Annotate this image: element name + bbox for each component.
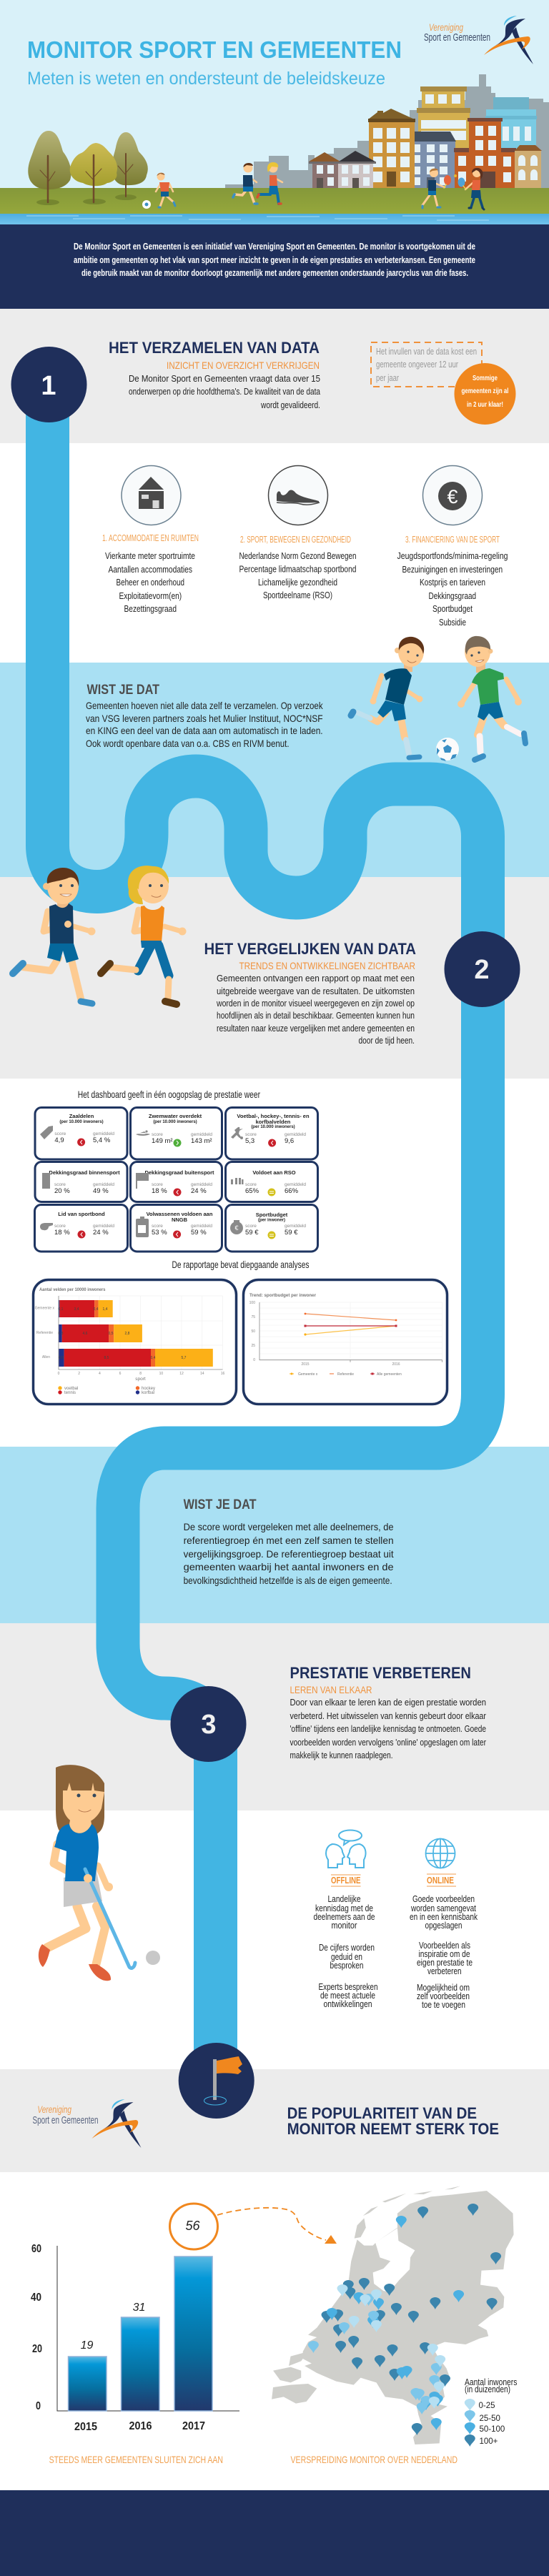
bar chart: aantal velden: 4 [99, 1372, 101, 1376]
line chart: trend sportbudget: Alle gemeenten [377, 1372, 402, 1377]
dashboard card: buitensport: Dekkingsgraad buitensport [144, 1169, 214, 1176]
column 1: accommodatie: Vierkante meter sportruimte [105, 550, 195, 561]
panel: wist je dat 2: De score wordt vergeleken met alle deelnemers, de [184, 1521, 394, 1532]
offline block: De cijfers worden [319, 1942, 375, 1953]
bar chart: aantal velden: 0,1 [59, 1307, 64, 1312]
column 3: financiering: Subsidie [439, 617, 466, 628]
map legend [465, 2377, 517, 2447]
panel: wist je dat 1: WIST JE DAT [87, 683, 159, 698]
grass strip [0, 188, 549, 214]
figure: soccer player 2 [458, 636, 525, 760]
dashboard card: velden: (per 10.000 inwoners) [251, 1125, 295, 1129]
dashboard card: buitensport: 18 % [152, 1187, 167, 1195]
dashboard card: sportbudget: 59 € [245, 1229, 259, 1237]
logo: Vereniging Sport en Gemeenten small: Vereniging [37, 2104, 71, 2115]
bar chart: aantal velden: Gemeente x [35, 1307, 54, 1311]
column 3: financiering: 3. FINANCIERING VAN DE SPORT [405, 535, 500, 545]
figure: tennis players [422, 168, 484, 209]
text block: prestatie: Door van elkaar te leren kan de eigen prestatie worden [290, 1697, 486, 1708]
panel: wist je dat 2: vergelijkingsgroep. De referentiegroep bestaat uit [184, 1548, 394, 1560]
column 3: financiering: Sportbudget [432, 603, 473, 614]
map legend: Aantal inwoners [465, 2377, 517, 2387]
panel: wist je dat 1: van VSG leveren partners zoals het Mulier Instituut, NOC*NSF [86, 713, 323, 724]
text block: prestatie: verbeterd. Het uitwisselen van kennis gebeurt door elkaar [290, 1710, 487, 1721]
bar chart: aantal velden: sport [135, 1377, 146, 1382]
dashboard card: sportbond: 18 % [54, 1229, 70, 1237]
bar chart: aantal gemeenten: 20 [32, 2343, 42, 2355]
column 1: accommodatie [102, 533, 199, 614]
icon: talking heads [326, 1830, 365, 1868]
bar chart: aantal velden: 2 [78, 1372, 80, 1376]
dashboard card: binnensport: gemiddeld [93, 1182, 114, 1187]
dashboard card: sportbond: 24 % [93, 1229, 109, 1237]
dashboard card: sportbond: score [54, 1224, 66, 1229]
dashboard card: nngb: score [152, 1224, 163, 1229]
text block: verzamelen: De Monitor Sport en Gemeenten vraagt data over 15 [129, 373, 320, 384]
column 2: sport bewegen: 2. SPORT, BEWEGEN EN GEZONDHEID [240, 535, 351, 545]
dashboard card: rso [226, 1162, 317, 1202]
offline block: Experts bespreken [319, 1981, 377, 1992]
offline block: ontwikkelingen [323, 1998, 372, 2009]
heading: populariteit [287, 2104, 499, 2138]
map legend: 25-50 [479, 2414, 500, 2423]
panel: wist je dat 1: Ook wordt openbare data van o.a. CBS en RIVM benut. [86, 738, 290, 749]
callout: orange circle [455, 363, 516, 425]
panel: wist je dat 2: gemeenten waarbij het aantal inwoners en de [184, 1561, 394, 1572]
online block: inspiratie om de [419, 1948, 470, 1959]
bar chart: aantal gemeenten: 56 [185, 2219, 200, 2233]
dashboard card: sportbudget: € [234, 1224, 239, 1232]
text block: prestatie: voorbeelden worden vervolgens 'online' opgeslagen om later [290, 1737, 487, 1748]
online block: eigen prestatie te [417, 1957, 473, 1968]
dashboard card: velden: 9,6 [285, 1137, 294, 1145]
text block: vergelijken: uitgebreide weergave van de resultaten. De uitkomsten [217, 986, 415, 996]
dashboard card: velden: 5,3 [245, 1137, 254, 1145]
header title: MONITOR SPORT EN GEMEENTEN [27, 36, 402, 63]
dashboard card: nngb [130, 1205, 222, 1252]
icon: globe [426, 1838, 455, 1868]
dashboard card: velden: korfbalvelden [256, 1119, 291, 1125]
figure: running woman in scene [257, 162, 282, 204]
dashboard card: zwemwater: gemiddeld [191, 1132, 212, 1137]
panel: wist je dat 2: bevolkingsdichtheid hetzelfde is als de eigen gemeente. [184, 1575, 392, 1586]
panel: wist je dat 2: WIST JE DAT [184, 1497, 257, 1512]
offline block [313, 1830, 377, 2009]
subheading: trends: TRENDS EN ONTWIKKELINGEN ZICHTBAAR [239, 960, 415, 971]
bar chart: aantal gemeenten [31, 2204, 239, 2433]
bar chart: aantal velden: 8,5 [104, 1356, 109, 1360]
step circle 2 [445, 931, 520, 1007]
dashboard card: zwemwater: 143 m² [191, 1137, 212, 1145]
footer band [0, 2490, 549, 2576]
icon: football [436, 738, 459, 761]
bar chart: aantal velden: Aantal velden per 10000 inwoners [39, 1287, 106, 1292]
heading: prestatie verbeteren: PRESTATIE VERBETEREN [290, 1664, 471, 1682]
map pins: 25-50 [308, 2294, 442, 2414]
city skyline and buildings [225, 74, 549, 188]
line chart: trend sportbudget: 50 [251, 1329, 255, 1334]
bar chart: aantal velden: 5,7 [182, 1356, 187, 1360]
map pins: 0-25 [337, 2284, 445, 2409]
callout: orange circle: gemeenten zijn al [462, 387, 509, 395]
dashboard card: sportbudget: 59 € [285, 1229, 298, 1237]
dashboard card: nngb: gemiddeld [191, 1224, 212, 1229]
bar chart: aantal velden: voetbal [64, 1387, 78, 1391]
bar chart: aantal gemeenten: 2015 [74, 2421, 97, 2433]
dashboard card: zaaldelen: 4,9 [54, 1136, 64, 1144]
icon: euro: € [447, 486, 458, 507]
line chart: trend sportbudget: 25 [251, 1344, 255, 1348]
dashboard card: nngb: 53 % [152, 1229, 167, 1237]
bar chart: aantal velden: 0,4 [94, 1307, 99, 1312]
dashboard card: zwemwater [130, 1108, 222, 1159]
online block: zelf voorbeelden [417, 1991, 470, 2001]
dashboard card: zwemwater: score [152, 1132, 163, 1137]
figure: boy with ball [142, 173, 175, 209]
online block: worden samengevat [410, 1903, 476, 1913]
dashboard card: zaaldelen: (per 10.000 inwoners) [59, 1120, 104, 1124]
bar chart: aantal velden: 4,6 [83, 1332, 88, 1336]
dashboard card: nngb: Volwassenen voldoen aan [147, 1211, 213, 1217]
column 3: financiering: Dekkingsgraad [429, 590, 476, 601]
online block: Goede voorbeelden [412, 1893, 475, 1904]
dashboard card: velden: Voetbal-, hockey-, tennis- en [237, 1113, 310, 1119]
dashboard card: rso: gemiddeld [285, 1182, 306, 1187]
bar chart: aantal gemeenten: 2017 [182, 2420, 205, 2432]
dashboard card: sportbudget: score [245, 1224, 257, 1229]
dashboard card: sportbudget [226, 1205, 317, 1252]
water strip [0, 214, 549, 224]
map pins: 50-100 [327, 2216, 464, 2430]
logo: Vereniging Sport en Gemeenten small: Sport en Gemeenten [33, 2115, 99, 2126]
figure: running man in scene [233, 163, 257, 204]
dashboard card: buitensport: 24 % [191, 1187, 207, 1195]
step circle 3 [170, 1686, 246, 1762]
report heading: De rapportage bevat diepgaande analyses [172, 1259, 309, 1270]
online block: toe te voegen [422, 1999, 465, 2010]
logo: Vereniging Sport en Gemeenten: Vereniging [429, 21, 463, 33]
column 1: accommodatie: Beheer en onderhoud [116, 577, 184, 588]
bar chart: aantal gemeenten: 40 [31, 2292, 41, 2304]
dashboard card: binnensport: Dekkingsgraad binnensport [49, 1169, 120, 1176]
figure: hockey player [39, 1765, 160, 1981]
bar chart: aantal velden: tennis [64, 1391, 76, 1395]
line chart: trend sportbudget: Gemeente x [298, 1372, 318, 1377]
dashboard card: sportbudget: gemiddeld [285, 1224, 306, 1229]
arrow: dashed curve to map [217, 2208, 337, 2244]
dashboard card: zwemwater: (per 10.000 inwoners) [153, 1120, 197, 1124]
map legend: 100+ [479, 2437, 498, 2446]
dashboard card: sportbudget: (per inwoner) [258, 1218, 285, 1222]
dashboard card: zaaldelen: gemiddeld [93, 1131, 114, 1136]
map: Nederland [272, 2186, 514, 2444]
text block: vergelijken [216, 973, 415, 1046]
figure: running man [13, 868, 96, 1004]
caption: steeds meer gemeenten: STEEDS MEER GEMEENTEN SLUITEN ZICH AAN [49, 2454, 223, 2465]
column 2: sport bewegen: Percentage lidmaatschap sportbond [239, 563, 356, 575]
dashboard card: rso: 65% [245, 1187, 259, 1195]
step circle 1 [11, 347, 87, 422]
dashboard card: sportbond: gemiddeld [93, 1224, 114, 1229]
subheading: leren van elkaar: LEREN VAN ELKAAR [290, 1684, 372, 1695]
step circle 1: 1 [41, 371, 56, 401]
online block [410, 1838, 478, 2010]
line chart: trend sportbudget: Referentie [337, 1372, 354, 1377]
dashboard card: sportbond [34, 1205, 127, 1252]
dashboard card: buitensport: gemiddeld [191, 1182, 212, 1187]
dashboard card: zwemwater: 149 m² [152, 1137, 173, 1145]
bar chart: aantal velden: 0,4 [151, 1356, 156, 1360]
text block: vergelijken: Gemeenten ontvangen een rapport op maat met een [217, 973, 415, 984]
panel: wist je dat 1: en KING een deel van de data aan om automatisch in te laden. [86, 725, 323, 736]
line chart: trend sportbudget: 2016 [392, 1362, 400, 1367]
logo: Vereniging Sport en Gemeenten small [33, 2099, 142, 2148]
online block: opgeslagen [425, 1920, 462, 1931]
header subtitle: Meten is weten en ondersteunt de beleidskeuze [27, 69, 385, 89]
dashboard card: zwemwater: Zwemwater overdekt [149, 1113, 202, 1119]
panel: wist je dat 1 [86, 683, 323, 749]
panel: wist je dat 2 [184, 1497, 394, 1586]
caption: verspreiding: VERSPREIDING MONITOR OVER NEDERLAND [290, 2454, 458, 2465]
bar chart: aantal velden: hockey [142, 1387, 155, 1391]
column 1: accommodatie: Exploitatievorm(en) [119, 590, 182, 601]
callout: orange circle: Sommige [473, 374, 498, 382]
dashboard card: buitensport: score [152, 1182, 163, 1187]
line chart: trend sportbudget: Trend: sportbudget per inwoner [249, 1293, 316, 1298]
bar chart: aantal velden: 2,8 [125, 1332, 130, 1336]
bar chart: aantal gemeenten: 0 [36, 2400, 41, 2412]
step circle 3: 3 [201, 1710, 217, 1740]
column 2: sport bewegen: Sportdeelname (RSO) [263, 590, 332, 600]
step circle 2: 2 [474, 955, 490, 985]
dashboard card: rso: Voldoet aan RSO [252, 1169, 296, 1176]
dashboard card: velden: score [245, 1132, 257, 1137]
callout: 12 uur: gemeente ongeveer 12 uur [376, 359, 458, 370]
dashboard card: nngb: NNGB [172, 1217, 188, 1223]
heading: het vergelijken van data: HET VERGELIJKEN VAN DATA [204, 940, 416, 958]
intro panel [0, 224, 549, 309]
bar chart: aantal velden: 8 [139, 1372, 142, 1376]
dashboard card: nngb: 59 % [191, 1229, 207, 1237]
offline block: de meest actuele [320, 1990, 375, 2001]
bar chart: aantal velden: 6 [119, 1372, 122, 1376]
subheading: inzicht: INZICHT EN OVERZICHT VERKRIJGEN [167, 360, 320, 371]
column 3: financiering: Bezuinigingen en investeringen [402, 564, 503, 575]
map legend: 50-100 [479, 2425, 505, 2434]
logo: Vereniging Sport en Gemeenten: Sport en Gemeenten [424, 32, 490, 44]
dashboard card: rso: 66% [285, 1187, 299, 1195]
bar chart: aantal velden: 0,5 [109, 1332, 114, 1336]
bar chart: aantal velden: 14 [200, 1372, 204, 1376]
callout: orange circle: in 2 uur klaar! [467, 400, 503, 409]
bar chart: aantal velden: 0,5 [59, 1356, 64, 1360]
icon: house [122, 466, 181, 525]
column 1: accommodatie: 1. ACCOMMODATIE EN RUIMTEN [102, 533, 199, 543]
text block: vergelijken: hoofdlijnen als in detail beschikbaar. Gemeenten kunnen hun [217, 1010, 415, 1021]
text block: prestatie: 'offline' tijdens een landelijke kennisdag te ontmoeten. Goede [290, 1723, 486, 1734]
figure: running woman [101, 866, 186, 1004]
offline block: OFFLINE [331, 1875, 361, 1886]
column 2: sport bewegen [239, 535, 356, 600]
icon: euro [423, 466, 482, 525]
bar chart: aantal velden: Referentie [36, 1331, 53, 1335]
map legend: (in duizenden) [465, 2384, 510, 2394]
column 2: sport bewegen: Nederlandse Norm Gezond Bewegen [239, 550, 356, 561]
text block: vergelijken: door de tijd heen. [359, 1035, 415, 1046]
offline block: monitor [332, 1920, 357, 1931]
column 3: financiering: Jeugdsportfonds/minima-regeling [397, 550, 508, 561]
figure: soccer player 1 [351, 637, 424, 758]
bar chart: aantal velden: korfbal [142, 1391, 154, 1395]
column 3: financiering [397, 535, 508, 628]
bar chart: aantal gemeenten: 2016 [129, 2420, 152, 2432]
icon: shoe [269, 466, 327, 525]
offline block: besproken [330, 1960, 363, 1971]
column 1: accommodatie: Aantallen accommodaties [109, 564, 192, 575]
dashboard card: velden [226, 1108, 317, 1159]
online block: en in een kennisbank [410, 1911, 478, 1922]
offline block: deelnemers aan de [313, 1911, 375, 1922]
dashboard card: binnensport: 49 % [93, 1187, 109, 1195]
bar chart: aantal velden [33, 1279, 236, 1404]
text block: vergelijken: resultaten naar keuze vergelijken met andere gemeenten en [217, 1023, 415, 1034]
dashboard card: sportbond: Lid van sportbond [58, 1211, 105, 1217]
dashboard card: buitensport [130, 1162, 222, 1202]
line chart: trend sportbudget: 0 [253, 1358, 255, 1362]
text block: verzamelen: wordt gevalideerd. [260, 400, 320, 410]
finish circle with flag [179, 2043, 254, 2119]
panel: wist je dat 2: referentiegroep én met een zelf samen te stellen [184, 1535, 394, 1546]
logo: Vereniging Sport en Gemeenten [424, 16, 533, 64]
bar chart: aantal gemeenten: 60 [31, 2243, 41, 2255]
bar chart: aantal velden: 1,4 [103, 1307, 108, 1312]
heading: populariteit: DE POPULARITEIT VAN DE [287, 2104, 477, 2122]
column 2: sport bewegen: Lichamelijke gezondheid [258, 577, 337, 588]
offline block: geduid en [331, 1951, 362, 1962]
heading: het verzamelen van data: HET VERZAMELEN VAN DATA [109, 339, 320, 357]
bar chart: aantal gemeenten: 19 [81, 2339, 93, 2352]
text block: verzamelen: onderwerpen op drie hoofdthema's. De kwaliteit van de data [129, 386, 321, 397]
bar chart: aantal velden: 0,3 [59, 1332, 64, 1336]
bar chart: aantal velden: Allen [42, 1355, 50, 1359]
callout: 12 uur: per jaar [376, 372, 399, 383]
bar chart: aantal velden: 3,4 [74, 1307, 79, 1312]
dashboard heading: Het dashboard geeft in één oogopslag de prestatie weer [78, 1089, 260, 1100]
bar chart: aantal gemeenten: 31 [133, 2302, 145, 2314]
journey path [47, 400, 483, 2059]
line chart: trend sportbudget: 75 [251, 1315, 255, 1319]
heading: populariteit: MONITOR NEEMT STERK TOE [287, 2120, 499, 2138]
bar chart: aantal velden: 10 [159, 1372, 163, 1376]
line chart: trend sportbudget [243, 1279, 447, 1404]
dashboard card: binnensport [35, 1162, 127, 1202]
callout: 12 uur [371, 342, 482, 387]
dashboard card: zaaldelen: score [54, 1131, 66, 1136]
dashboard card: zaaldelen: Zaaldelen [69, 1113, 94, 1119]
column 3: financiering: Kostprijs en tarieven [420, 577, 485, 588]
bar chart: aantal velden: 0 [58, 1372, 60, 1376]
dashboard card: binnensport: score [54, 1182, 66, 1187]
map legend: 0-25 [479, 2402, 495, 2410]
online block: ONLINE [427, 1875, 454, 1886]
dashboard card: zaaldelen: 5,4 % [93, 1136, 111, 1144]
map pins: 100+ [322, 2204, 501, 2435]
text block: verzamelen [129, 373, 321, 410]
callout: 12 uur: Het invullen van de data kost een [376, 346, 477, 357]
online block: Mogelijkheid om [417, 1982, 470, 1993]
dashboard card: zaaldelen [35, 1108, 127, 1159]
offline block: kennisdag met de [315, 1903, 373, 1913]
line chart: trend sportbudget: 2015 [301, 1362, 310, 1367]
bar chart: aantal velden: 12 [179, 1372, 184, 1376]
text block: prestatie [290, 1697, 487, 1760]
column 1: accommodatie: Bezettingsgraad [124, 603, 177, 614]
bar chart: aantal velden: 16 [221, 1372, 224, 1376]
dashboard card: velden: gemiddeld [285, 1132, 306, 1137]
dashboard card: rso: score [245, 1182, 257, 1187]
text block: prestatie: makkelijk te kunnen raadplegen. [290, 1750, 393, 1760]
line chart: trend sportbudget: 100 [249, 1301, 255, 1305]
offline block: Landelijke [327, 1893, 360, 1904]
header background: sky [0, 0, 549, 188]
trees [28, 131, 148, 205]
dashboard card: sportbudget: Sportbudget [256, 1212, 288, 1218]
online block: verbeteren [427, 1966, 462, 1976]
dashboard card: binnensport: 20 % [54, 1187, 70, 1195]
panel: wist je dat 1: Gemeenten hoeven niet alle data zelf te verzamelen. Op verzoek [86, 700, 323, 711]
online block: Voorbeelden als [419, 1940, 470, 1951]
text block: vergelijken: worden in de monitor visueel weergegeven en zijn zowel op [216, 998, 415, 1009]
